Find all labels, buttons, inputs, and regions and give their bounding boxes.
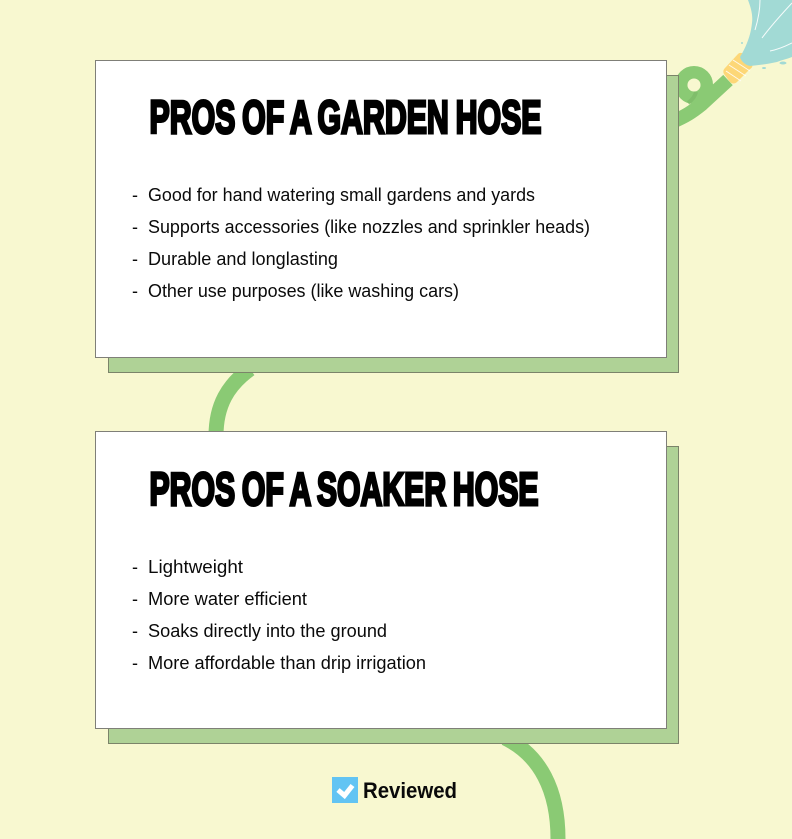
list: soaker hose pros: Soaks directly into the ground — [148, 621, 387, 641]
list: soaker hose pros: - — [132, 653, 138, 673]
logo: Reviewed: Reviewed — [363, 778, 457, 803]
list: garden hose pros: - — [132, 249, 138, 269]
list: garden hose pros: - — [132, 185, 138, 205]
list: soaker hose pros: More affordable than drip irrigation — [148, 653, 426, 673]
hose segment at the bottom — [505, 738, 558, 839]
hose loop behind the first card — [672, 72, 728, 122]
hose segment between the cards — [216, 369, 250, 436]
heading: pros of a garden hose: PROS OF A GARDEN HOSE — [150, 91, 542, 143]
panel: pros of a soaker hose — [96, 432, 678, 744]
list: garden hose pros: - — [132, 281, 138, 301]
list: garden hose pros: Supports accessories (like nozzles and sprinkler heads) — [148, 217, 590, 237]
list: garden hose pros: Other use purposes (like washing cars) — [148, 281, 459, 301]
heading: pros of a soaker hose: PROS OF A SOAKER HOSE — [150, 463, 538, 515]
list: garden hose pros: Durable and longlasting — [148, 249, 338, 269]
list: soaker hose pros: - — [132, 589, 138, 609]
icon: hose nozzle spraying water — [723, 0, 792, 84]
panel: pros of a garden hose — [96, 60, 678, 372]
list: garden hose pros: Good for hand watering small gardens and yards — [148, 185, 535, 205]
logo: Reviewed — [332, 777, 457, 803]
list: soaker hose pros: - — [132, 557, 138, 577]
list: garden hose pros — [132, 185, 590, 301]
list: soaker hose pros: - — [132, 621, 138, 641]
list: garden hose pros: - — [132, 217, 138, 237]
list: soaker hose pros: More water efficient — [148, 589, 307, 609]
list: soaker hose pros: Lightweight — [148, 557, 243, 577]
list: soaker hose pros — [132, 557, 426, 673]
